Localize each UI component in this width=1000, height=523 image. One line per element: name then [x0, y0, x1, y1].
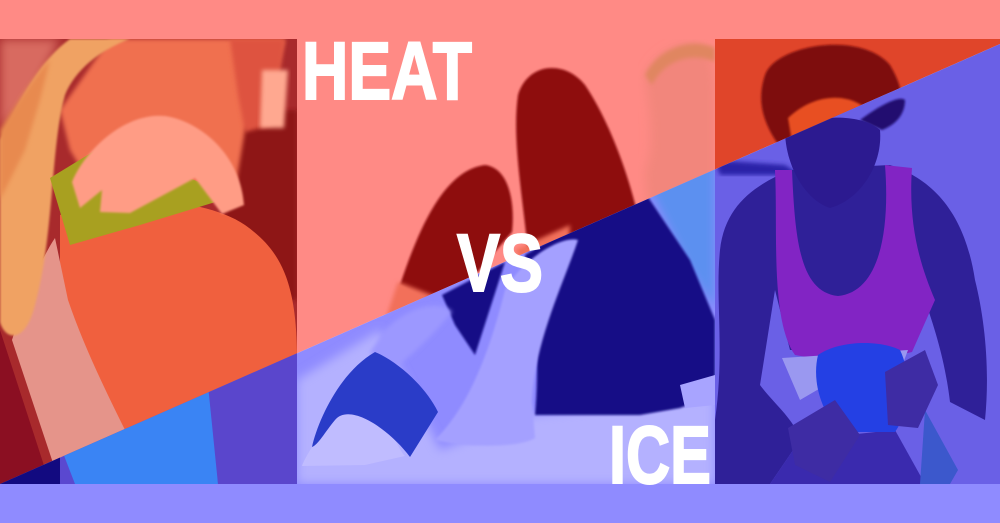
photo: woman holding heat pack, lower part: [0, 353, 297, 484]
heading: VS: VS: [457, 218, 543, 309]
photo: woman with knee pack, upper part: [715, 39, 1000, 170]
photo: woman with knee pack, lower part: [715, 39, 1000, 484]
heading: ICE: ICE: [609, 410, 711, 501]
photo: woman stretching, upper part: [297, 39, 715, 354]
top band: [0, 0, 1000, 39]
photo: woman stretching with ice pack on foot: [297, 169, 715, 484]
photo: woman holding heat pack on neck: [0, 39, 297, 484]
bottom band: [0, 484, 1000, 523]
heading: HEAT: HEAT: [302, 26, 472, 117]
